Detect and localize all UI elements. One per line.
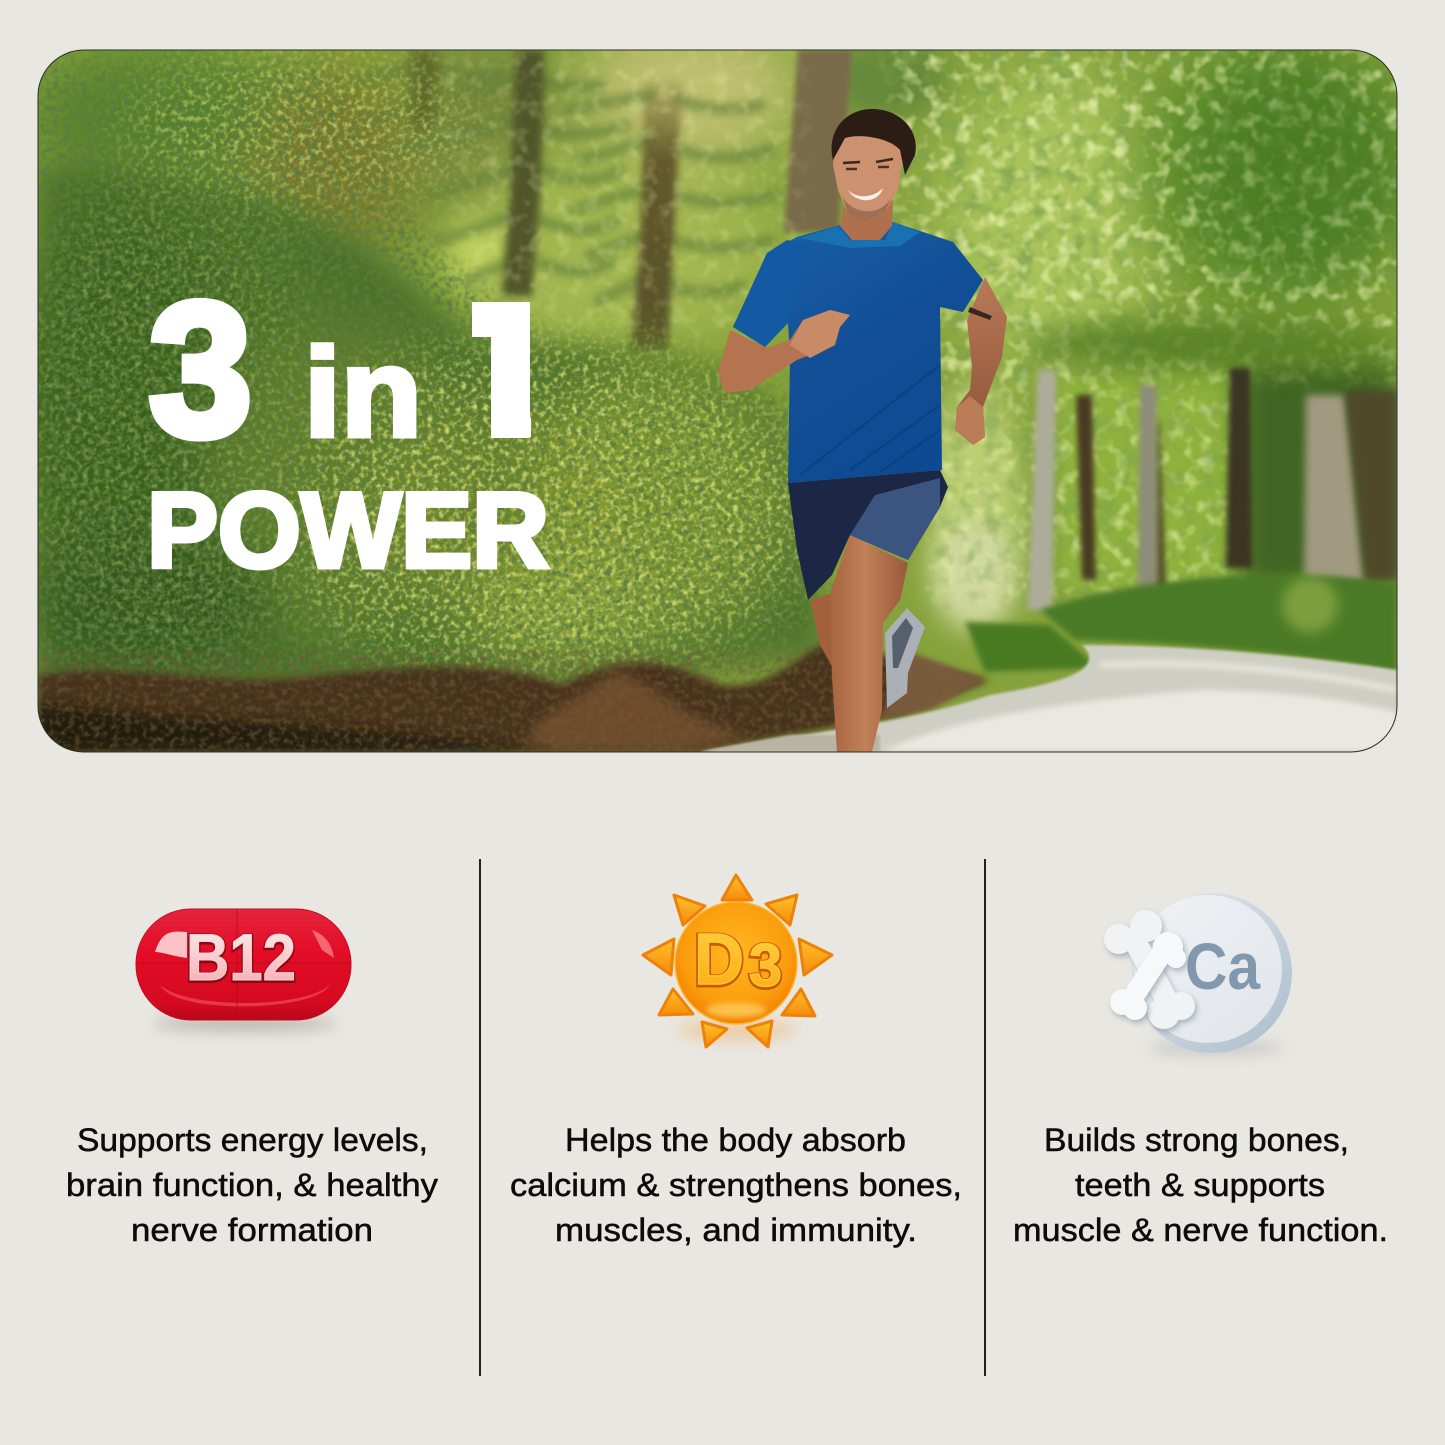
text: B12 description: nerve formation (131, 1212, 373, 1248)
conifer branches (360, 70, 775, 300)
neck (840, 195, 893, 240)
dappled light between conifers (432, 50, 808, 342)
title: 3 in 1 power: in (304, 322, 422, 463)
icon: Ca tablet with bone (1104, 893, 1292, 1054)
shoe (885, 608, 925, 708)
t-shirt (733, 222, 983, 483)
icon: D3 sun: D (694, 920, 744, 1000)
text: calcium description: teeth & supports (1075, 1167, 1325, 1203)
text: D3 description: Helps the body absorb (565, 1122, 906, 1158)
text: calcium description: muscle & nerve function. (1013, 1212, 1388, 1248)
text: D3 description: muscles, and immunity. (555, 1212, 917, 1248)
title: 3 in 1 power: POWER (147, 470, 549, 590)
text: calcium description (1013, 1122, 1388, 1248)
tree trunks (410, 50, 852, 352)
text: D3 description: calcium & strengthens bones, (510, 1167, 962, 1203)
runner (718, 109, 1007, 752)
text: B12 description: Supports energy levels, (77, 1122, 428, 1158)
road and grass verge (700, 575, 1397, 752)
bone rear (1104, 910, 1195, 1029)
left bushes (20, 166, 825, 690)
rear leg (810, 594, 832, 666)
icon: B12 capsule: B12 (186, 921, 296, 995)
dirt bank (38, 640, 990, 752)
panel: hero photo of runner in forest (20, 20, 1420, 752)
icon: D3 sun: 3 (749, 932, 782, 999)
text: D3 description (510, 1122, 962, 1248)
right arm (955, 277, 1007, 445)
hair (832, 109, 916, 175)
title: 3 in 1 power (148, 298, 552, 570)
distant trunks (1028, 368, 1397, 610)
icon: B12 capsule (136, 909, 351, 1032)
icon: D3 sun: D (694, 921, 744, 1001)
text: B12 description: brain function, & healthy (66, 1167, 438, 1203)
forest background (30, 20, 1420, 752)
icon: B12 capsule: B12 (186, 920, 296, 994)
text: calcium description: Builds strong bones, (1044, 1122, 1349, 1158)
foliage texture (38, 50, 1400, 710)
head (832, 109, 916, 222)
left arm and hand (718, 310, 850, 393)
shorts (788, 470, 948, 600)
text: B12 description (66, 1122, 438, 1248)
front leg (830, 535, 908, 752)
icon: D3 sun (643, 875, 832, 1047)
icon: D3 sun: 3 (749, 933, 782, 1000)
title: 3 in 1 power: 3 (149, 264, 252, 476)
bone front (1110, 932, 1186, 1020)
icon: Ca tablet with bone: Ca (1185, 929, 1261, 1003)
title: 3 in 1 power: 1 (456, 263, 563, 478)
